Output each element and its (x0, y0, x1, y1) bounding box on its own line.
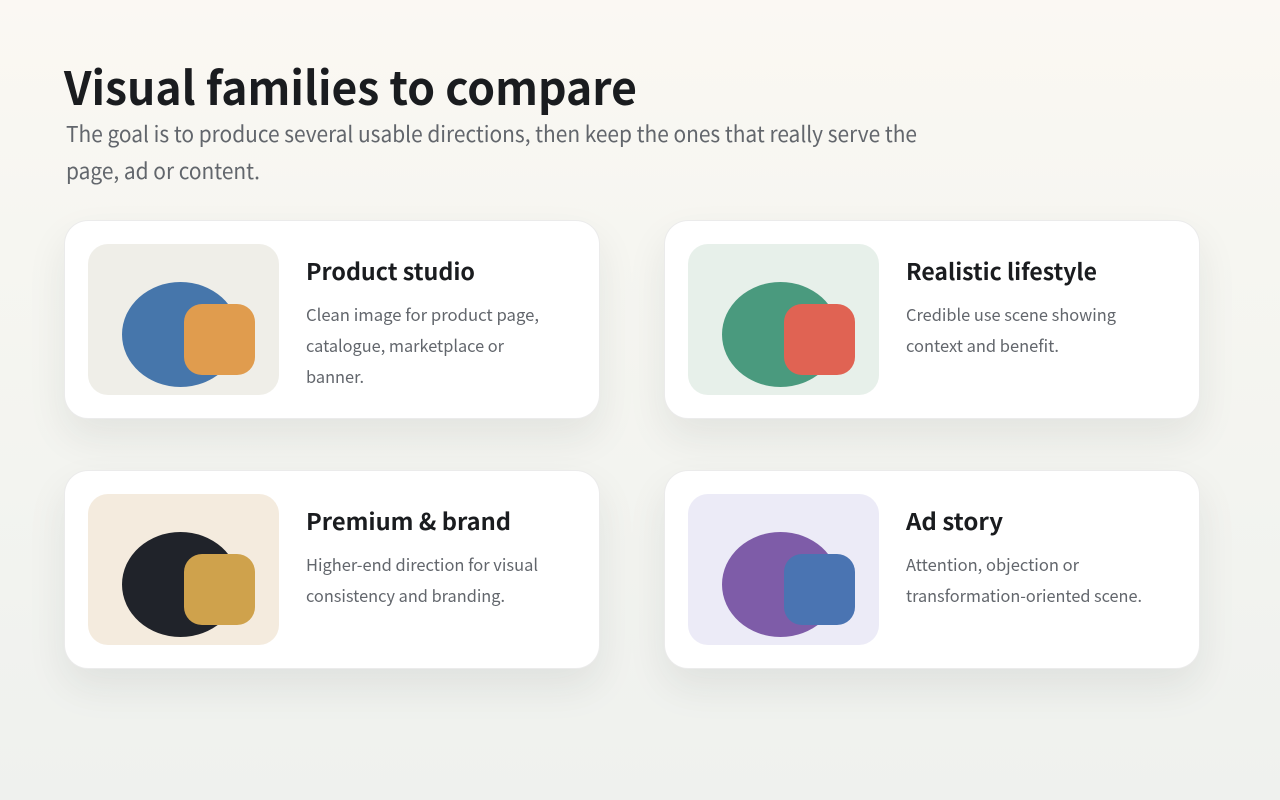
description: product studio: catalogue, marketplace or (306, 333, 505, 357)
heading: ad story: Ad story (905, 503, 1003, 537)
thumbnail: premium and brand (88, 494, 279, 645)
description: product studio: Clean image for product page, (306, 302, 539, 326)
description: ad story (906, 552, 1142, 607)
description: realistic lifestyle (906, 302, 1117, 357)
description: ad story: transformation-oriented scene. (906, 583, 1142, 607)
description: product studio (306, 302, 539, 388)
heading: product studio: Product studio (306, 253, 475, 287)
description: premium and brand (306, 552, 538, 607)
panel: product studio (64, 220, 600, 419)
description: realistic lifestyle: context and benefit. (906, 333, 1059, 357)
description: realistic lifestyle: Credible use scene showing (906, 302, 1117, 326)
thumbnail: realistic lifestyle (688, 244, 879, 395)
thumbnail: ad story (688, 494, 879, 645)
thumbnail: product studio (88, 244, 279, 395)
panel: premium and brand (64, 470, 600, 669)
subtitle: The goal is to produce several usable directions, then keep the ones that really serve the (66, 117, 917, 149)
heading: premium and brand: Premium & brand (306, 503, 511, 537)
description: premium and brand: Higher-end direction for visual (306, 552, 538, 576)
description: premium and brand: consistency and branding. (306, 583, 505, 607)
subtitle: page, ad or content. (66, 154, 260, 186)
description: product studio: banner. (306, 364, 364, 388)
title: Visual families to compare (63, 53, 637, 119)
subtitle (66, 117, 917, 186)
heading: realistic lifestyle: Realistic lifestyle (906, 253, 1097, 287)
panel: ad story (664, 470, 1200, 669)
description: ad story: Attention, objection or (906, 552, 1080, 576)
panel: realistic lifestyle (664, 220, 1200, 419)
